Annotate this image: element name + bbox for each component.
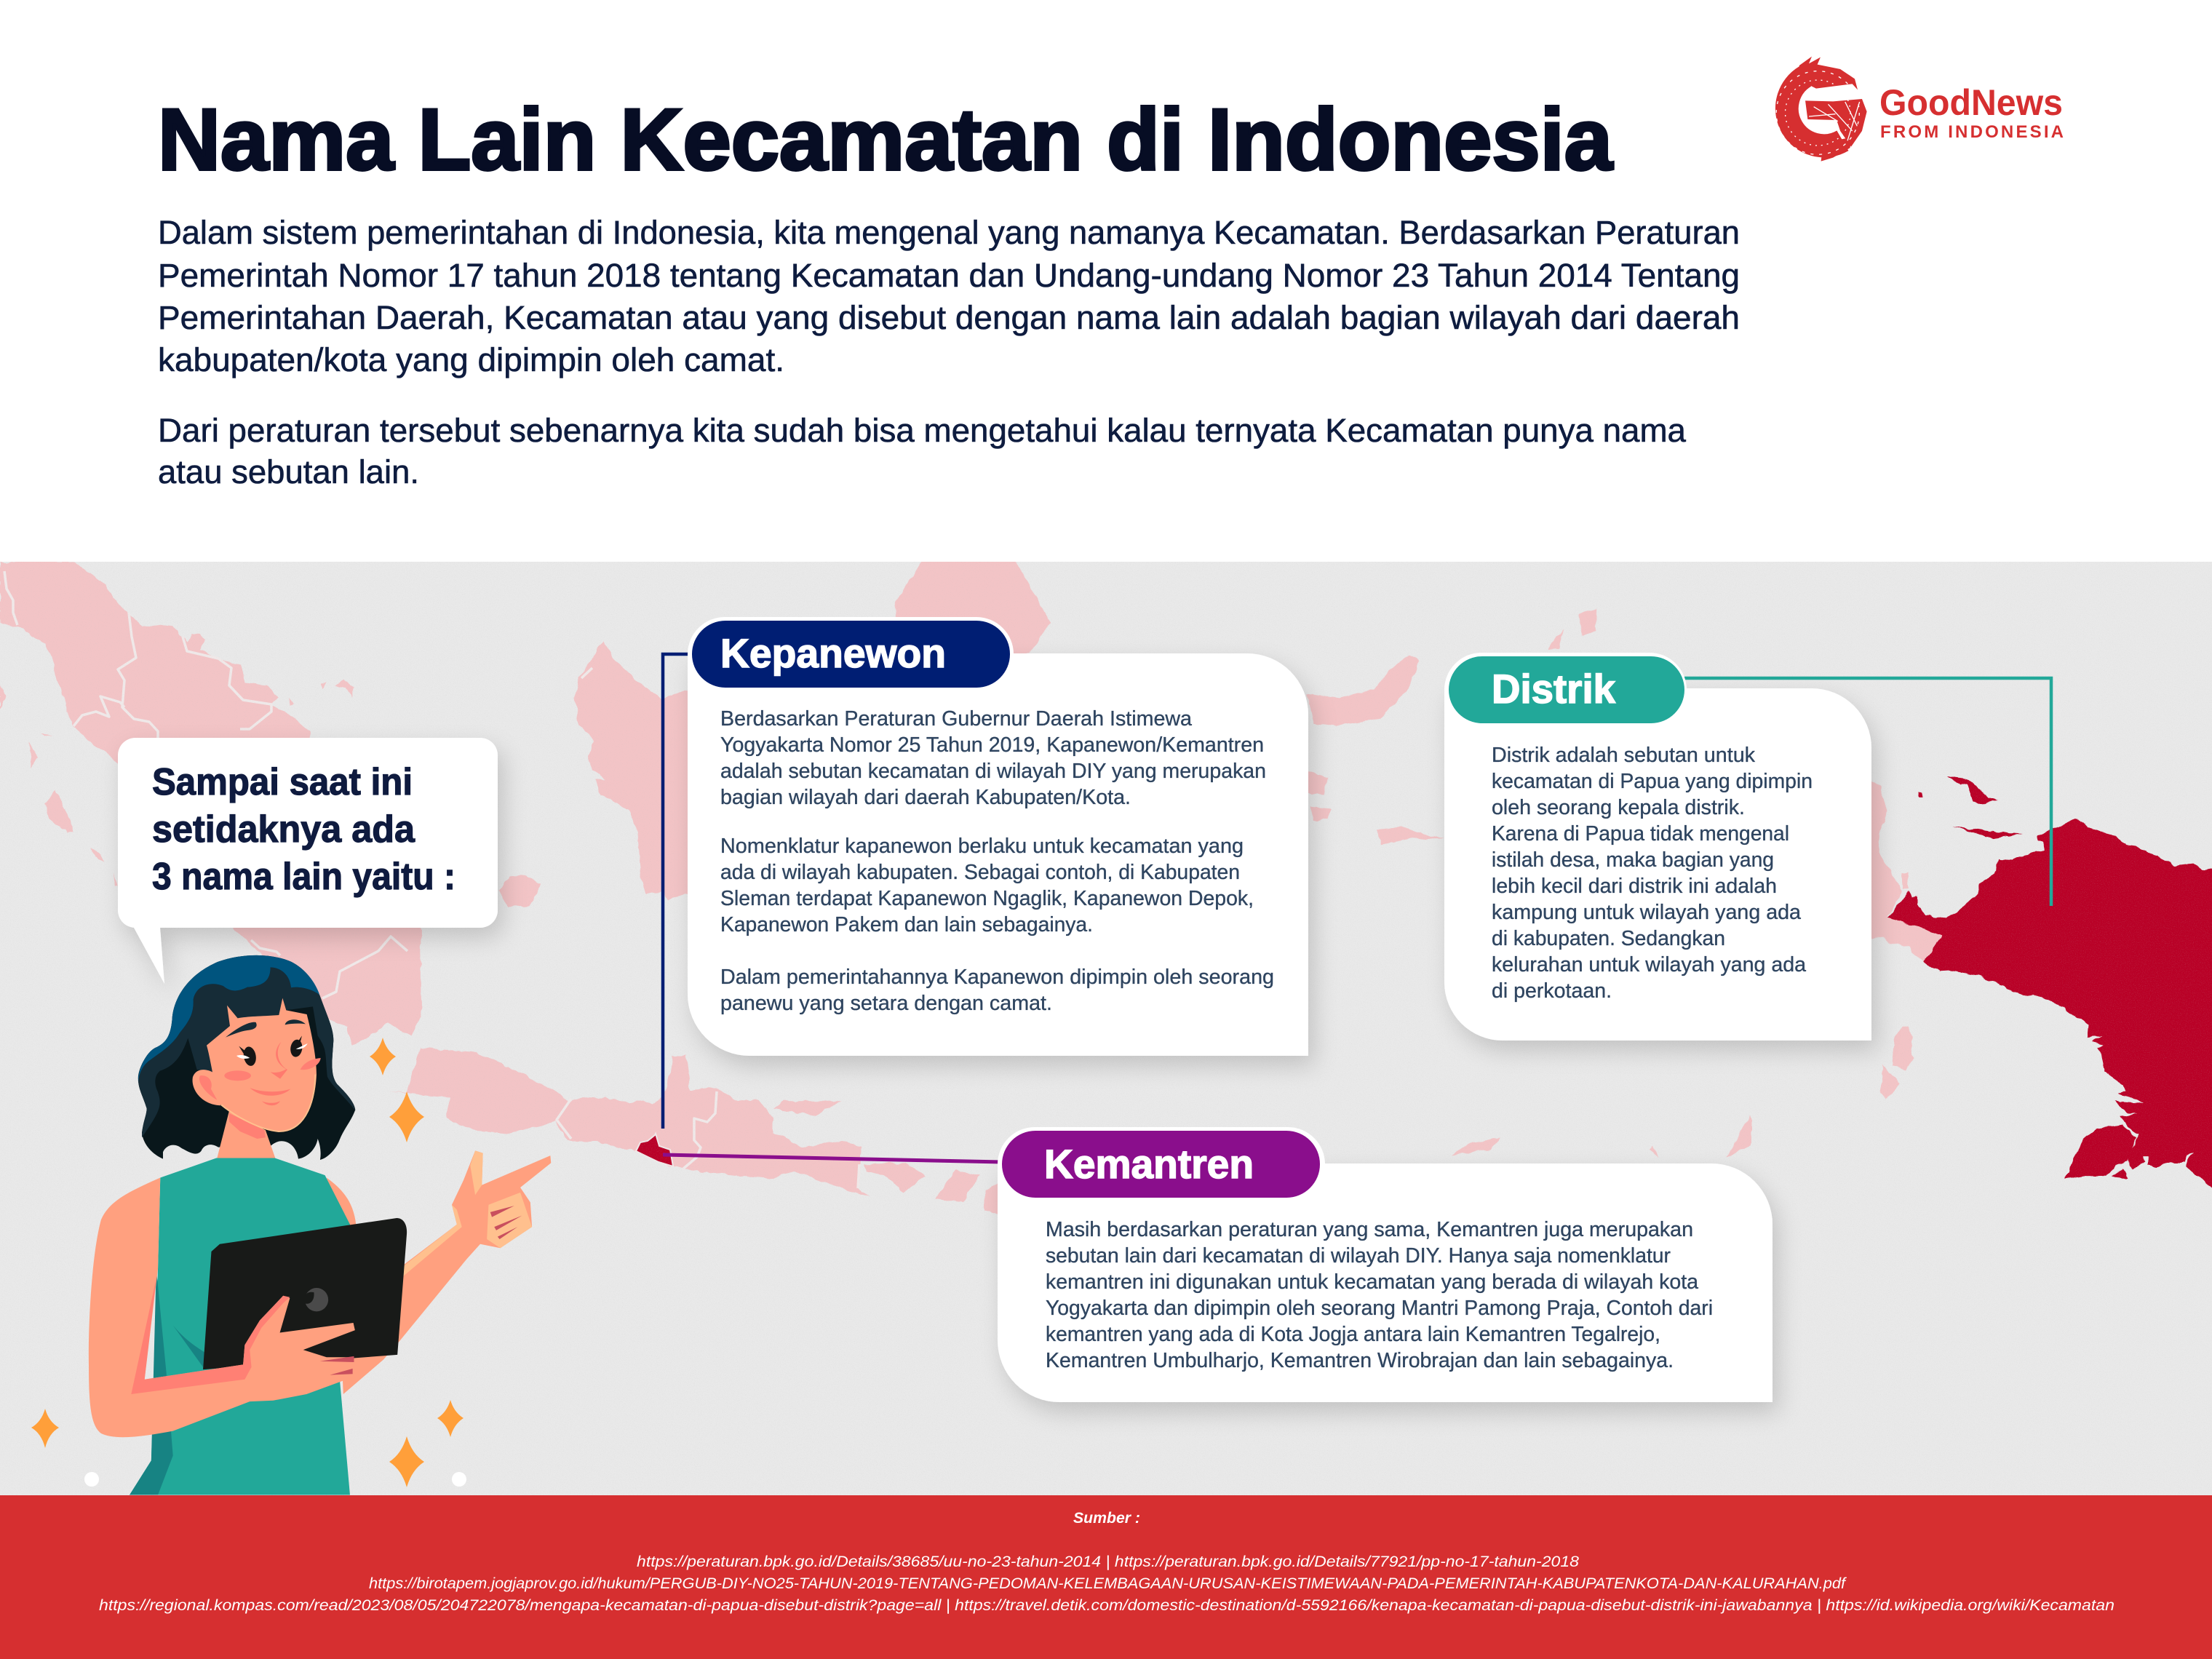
intro text block: Pemerintahan Daerah, Kecamatan atau yang disebut dengan nama lain adalah bagian wilayah dari daerah [158, 299, 1740, 336]
text: Kemantren description: sebutan lain dari kecamatan di wilayah DIY. Hanya saja nomenklatur [1046, 1244, 1671, 1268]
text: Kepanewon description: Kapanewon Pakem dan lain sebagainya. [720, 913, 1093, 936]
sources text: https://regional.kompas.com/read/2023/08/05/204722078/mengapa-kecamatan-di-papua-disebut-distrik?page=all | https://travel.detik.com/domestic-destination/d-5592166/kenapa-kecamatan-di-papua-disebut-distrik-ini-jawabannya | https://id.wikipedia.org/wiki/Kecamatan [99, 1597, 2114, 1614]
text: Kepanewon description: Nomenklatur kapanewon berlaku untuk kecamatan yang [720, 835, 1244, 858]
intro text block: atau sebutan lain. [158, 453, 419, 490]
sources text [99, 1510, 2114, 1614]
footer band [0, 1495, 2212, 1659]
left arm and hand [89, 1178, 355, 1437]
heading: Kemantren: Kemantren [1044, 1141, 1254, 1187]
sources text: https://peraturan.bpk.go.id/Details/38685/uu-no-23-tahun-2014 | https://peraturan.bpk.go.id/Details/77921/pp-no-17-tahun-2018 [637, 1553, 1579, 1570]
connector: Kemantren line [663, 1155, 1002, 1162]
text: Distrik description [1492, 744, 1813, 1003]
text: Distrik description: istilah desa, maka bagian yang [1492, 848, 1774, 872]
text: Kepanewon description: bagian wilayah dari daerah Kabupaten/Kota. [720, 786, 1131, 809]
sparkle [31, 1409, 59, 1448]
heading: Distrik: Distrik [1492, 666, 1616, 712]
heading: Kepanewon: Kepanewon [720, 630, 946, 676]
head [138, 955, 355, 1160]
map band background [0, 562, 2212, 1496]
text: Kepanewon description: Berdasarkan Peraturan Gubernur Daerah Istimewa [720, 707, 1193, 731]
text: Kepanewon description [720, 707, 1274, 1015]
bubble shape [118, 738, 498, 984]
sources text: Sumber : [1073, 1510, 1140, 1527]
intro text block [158, 214, 1740, 490]
intro text block: Dalam sistem pemerintahan di Indonesia, kita mengenal yang namanya Kecamatan. Berdasarkan Peraturan [158, 214, 1740, 251]
sparkle [389, 1436, 424, 1487]
text: Kepanewon description: Yogyakarta Nomor 25 Tahun 2019, Kapanewon/Kemantren [720, 733, 1264, 757]
pill: Kemantren [998, 1127, 1325, 1201]
card: Distrik [1444, 688, 1871, 1041]
sparkle [370, 1038, 396, 1075]
text: Kemantren description: Yogyakarta dan dipimpin oleh seorang Mantri Pamong Praja, Contoh dari [1046, 1297, 1713, 1320]
Kalimantan north [896, 560, 1051, 665]
pill: Kepanewon [688, 617, 1014, 691]
text: Kepanewon description: Sleman terdapat Kapanewon Ngaglik, Kapanewon Depok, [720, 887, 1254, 910]
text: Distrik description: Karena di Papua tidak mengenal [1492, 822, 1789, 846]
text: Distrik description: kecamatan di Papua yang dipimpin [1492, 770, 1813, 793]
title: Nama Lain Kecamatan di Indonesia [158, 91, 1613, 188]
text: Kemantren description: kemantren yang ada di Kota Jogja antara lain Kemantren Tegalrejo, [1046, 1323, 1660, 1346]
text: Distrik description: di kabupaten. Sedangkan [1492, 927, 1725, 950]
text: Distrik description: Distrik adalah sebutan untuk [1492, 744, 1755, 767]
bubble text: 3 nama lain yaitu : [152, 856, 455, 898]
logo: GoodNews from Indonesia [1776, 57, 2064, 162]
text: Kemantren description [1046, 1218, 1713, 1372]
text: Distrik description: kelurahan untuk wilayah yang ada [1492, 953, 1807, 976]
card: Kepanewon [688, 653, 1308, 1056]
text: Kepanewon description: adalah sebutan kecamatan di wilayah DIY yang merupakan [720, 760, 1266, 783]
Sulawesi, Maluku, pale islands east [1307, 608, 1751, 1158]
text: Kepanewon description: ada di wilayah kabupaten. Sebagai contoh, di Kabupaten [720, 861, 1240, 884]
text: Kepanewon description: panewu yang setara dengan camat. [720, 992, 1052, 1015]
map: Yogyakarta highlighted [636, 1134, 673, 1166]
connector: Distrik line [1684, 678, 2051, 906]
bubble text [152, 761, 455, 898]
Sumatra and western islands [0, 562, 712, 1045]
text: Kemantren description: Masih berdasarkan peraturan yang sama, Kemantren juga merupakan [1046, 1218, 1693, 1241]
Java, Madura, Bali, Lombok [389, 1048, 870, 1197]
icon: garuda ring [1776, 57, 1867, 162]
connector: Kepanewon line [663, 654, 692, 1129]
neck [217, 1111, 275, 1158]
panel: Kemantren [998, 1127, 1773, 1402]
text: Distrik description: di perkotaan. [1492, 979, 1612, 1003]
text: Distrik description: oleh seorang kepala distrik. [1492, 796, 1745, 819]
sparkle [437, 1400, 464, 1437]
map: Indonesia pale islands [0, 560, 1941, 1215]
text: Distrik description: lebih kecil dari distrik ini adalah [1492, 875, 1777, 898]
text: Distrik description: kampung untuk wilayah yang ada [1492, 901, 1802, 924]
map: Papua highlighted [1889, 776, 2212, 1190]
bubble text: setidaknya ada [152, 808, 415, 851]
sources text: https://birotapem.jogjaprov.go.id/hukum/PERGUB-DIY-NO25-TAHUN-2019-TENTANG-PEDOMAN-KELEMBAGAAN-URUSAN-KEISTIMEWAAN-PADA-PEMERINTAH-KABUPATENKOTA-DAN-KALURAHAN.pdf [369, 1575, 1847, 1592]
intro text block: kabupaten/kota yang dipimpin oleh camat. [158, 341, 784, 378]
pill: Distrik [1444, 653, 1687, 727]
West Papua pale and Tanimbar [1870, 781, 1941, 1099]
grain texture [0, 562, 2212, 1496]
speech bubble [118, 738, 498, 984]
logo wordmark: GoodNews [1879, 82, 2063, 123]
logo tagline: FROM INDONESIA [1880, 122, 2064, 142]
teal dress [130, 1158, 350, 1495]
text: Kemantren description: Kemantren Umbulharjo, Kemantren Wirobrajan dan lain sebagainya. [1046, 1349, 1674, 1372]
hair [138, 955, 355, 1160]
white dots [84, 1472, 466, 1487]
decorative sparkles [31, 1038, 464, 1487]
card: Kemantren [998, 1163, 1773, 1402]
panel: Kepanewon [688, 617, 1308, 1056]
tablet [203, 1218, 407, 1369]
map: province borders [4, 571, 859, 1188]
illustration: woman holding tablet [89, 955, 551, 1495]
right arm and pointing hand [327, 1150, 551, 1394]
intro text block: Pemerintah Nomor 17 tahun 2018 tentang Kecamatan dan Undang-undang Nomor 23 Tahun 2014 Tentang [158, 257, 1740, 294]
sparkle [389, 1091, 424, 1142]
text: Kemantren description: kemantren ini digunakan untuk kecamatan yang berada di wilayah kota [1046, 1270, 1699, 1294]
bubble text: Sampai saat ini [152, 761, 413, 803]
face [193, 998, 321, 1131]
panel: Distrik [1444, 653, 1871, 1041]
body [89, 1150, 551, 1495]
text: Kepanewon description: Dalam pemerintahannya Kapanewon dipimpin oleh seorang [720, 966, 1274, 989]
intro text block: Dari peraturan tersebut sebenarnya kita sudah bisa mengetahui kalau ternyata Kecamatan punya nama [158, 412, 1687, 449]
